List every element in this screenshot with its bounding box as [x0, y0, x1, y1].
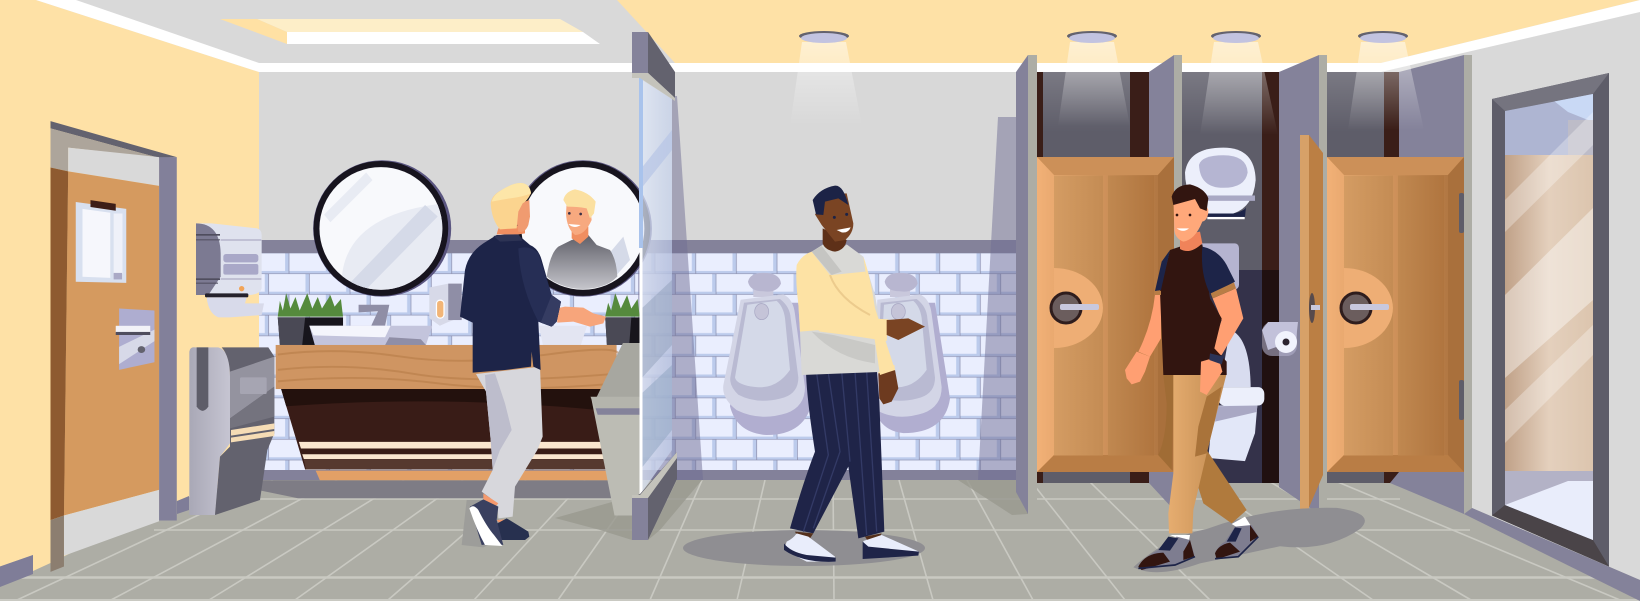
baseboard near dryer: [177, 496, 189, 514]
trash bin: [590, 343, 640, 516]
lower body: [462, 367, 543, 547]
stall partition B: [1149, 55, 1182, 510]
right arm: [1210, 288, 1243, 355]
hair: [491, 183, 531, 229]
wood top: [276, 345, 617, 389]
eyes and smile: [833, 213, 851, 232]
mirror right: [514, 160, 652, 297]
towel dispenser and hand dryer: [189, 223, 274, 515]
reflection glare: [599, 236, 630, 287]
light gradient back wall: [1037, 72, 1399, 132]
counter: [276, 345, 619, 480]
wainscot band: [259, 240, 1019, 253]
right hand: [1200, 357, 1222, 395]
ceiling: grey section: [0, 0, 690, 72]
mirror reflection of man: [547, 189, 630, 291]
hair: [1172, 184, 1208, 211]
top cap: [632, 32, 648, 73]
neck: [823, 228, 847, 252]
transom: [68, 148, 159, 186]
left wall: [0, 0, 259, 587]
face: [515, 200, 530, 232]
left shoe: [1138, 535, 1195, 570]
hand: [878, 370, 898, 404]
urinals: [723, 273, 950, 435]
left plant pots: [278, 293, 343, 345]
left hand: [1125, 352, 1150, 384]
stalls interior: [1037, 72, 1399, 483]
wall dispenser: [1185, 148, 1256, 219]
arm: [796, 252, 888, 341]
tank: [1197, 243, 1239, 289]
stall door 1: [1037, 157, 1174, 472]
neck: [497, 225, 525, 234]
man walking: [683, 186, 925, 566]
frame top: [51, 121, 177, 158]
yellow band: [797, 272, 880, 332]
lamp 2: [1058, 31, 1130, 126]
faucet: [359, 305, 389, 326]
back leg: [1195, 450, 1247, 523]
ceiling lamps: [790, 31, 1424, 135]
grey strap: [812, 246, 842, 275]
reflection neck: [572, 227, 588, 244]
towel dispenser: [196, 223, 264, 317]
head: [815, 193, 853, 242]
left door: [51, 121, 177, 572]
left arm: [1138, 295, 1161, 357]
door handle plate: [116, 309, 154, 370]
reveal: [51, 128, 159, 171]
cuff: [541, 295, 561, 327]
mirror left: [313, 160, 451, 297]
frame right: [159, 157, 177, 521]
right door with mirror glass: [1492, 73, 1609, 566]
open stall door: [1300, 135, 1323, 512]
lamp 3: [1200, 31, 1278, 135]
floor shadow: [1133, 508, 1365, 572]
floor shadow: [683, 530, 925, 566]
floor: [0, 480, 1640, 601]
lower chest shadow: [812, 332, 875, 363]
reflection body: [547, 235, 617, 291]
reflection eyes and smile: [568, 212, 582, 227]
right baseboard: [1464, 508, 1640, 601]
lamp 4: [1348, 31, 1424, 130]
right stall partition D: [1390, 55, 1472, 514]
toilet: [1185, 148, 1264, 461]
lamp 1: [790, 31, 862, 126]
door sign: [76, 200, 126, 283]
left shoe: [784, 532, 836, 562]
stall partition C: [1262, 55, 1327, 514]
stripes: [299, 442, 604, 448]
upper body: [1125, 184, 1243, 395]
sleeve highlight: [518, 247, 561, 327]
shaded hip: [1158, 375, 1173, 470]
floor shadow under counter: [261, 480, 614, 498]
base band: [259, 470, 1019, 480]
door leaf: [64, 171, 159, 516]
soap dispenser: [429, 284, 462, 326]
left wash area: [51, 121, 652, 572]
right shoe: [863, 533, 919, 559]
stall partition A: [1016, 55, 1037, 514]
right plant pot and basin: [539, 293, 640, 345]
trousers: [476, 367, 543, 518]
lower body: [1138, 373, 1258, 570]
collar: [493, 234, 522, 242]
trousers: [790, 368, 884, 538]
bowl: [1220, 330, 1251, 387]
eyes and smile: [1176, 214, 1191, 231]
orange plinth: [316, 471, 608, 480]
urinal left: [723, 273, 813, 435]
upper body: [460, 183, 606, 373]
door edge: [51, 167, 68, 520]
partition shadows on wall: [638, 96, 1016, 480]
upper body: [796, 186, 925, 375]
face: [1173, 192, 1208, 242]
lower body: [784, 365, 919, 562]
front leg: [1168, 373, 1227, 533]
bottom rail: [632, 452, 677, 540]
floor shadow: [462, 500, 507, 547]
watch: [1209, 353, 1224, 364]
sleeve fold: [830, 275, 870, 315]
sweater: [797, 244, 888, 375]
jacket: [460, 235, 561, 373]
reflection face: [566, 203, 592, 235]
man with dark t-shirt: [1125, 184, 1365, 572]
front shoe: [469, 493, 503, 546]
hinges: [1459, 193, 1464, 420]
lower dark wall: [1182, 270, 1279, 483]
right sleeve: [1202, 247, 1235, 295]
seat: [1218, 387, 1264, 406]
back shoe: [497, 518, 529, 540]
handle plate and lever: [1344, 268, 1393, 348]
ceiling light panel: [220, 19, 600, 44]
man at mirror: [460, 183, 606, 547]
neck: [1180, 232, 1202, 251]
hair: [813, 186, 848, 215]
hand: [887, 318, 925, 340]
reflection hair: [563, 189, 596, 218]
dark pillars: [1037, 72, 1399, 483]
urinal right: [873, 273, 950, 433]
glass pane: [639, 78, 672, 496]
toilet paper roll: [1262, 322, 1298, 356]
tile wall: [259, 253, 1019, 470]
glass partition: [632, 32, 677, 540]
stall door 2: [1327, 157, 1464, 472]
left wall white strip: [36, 0, 259, 72]
ceiling: yellow section: [617, 0, 1640, 63]
hand: [557, 307, 606, 327]
hand dryer: [189, 347, 274, 515]
floor shadows of partitions: [555, 480, 1028, 540]
base: [1208, 406, 1257, 461]
other sleeve: [863, 257, 895, 375]
white cornice strip: [259, 0, 1640, 72]
sink left: [309, 326, 432, 345]
t-shirt: [1160, 244, 1227, 375]
baseboard front: [0, 555, 33, 587]
cuff: [876, 365, 895, 373]
dark cabinet: [281, 389, 606, 470]
threshold: [64, 490, 159, 556]
right shoe: [1215, 517, 1258, 559]
back wall: [259, 72, 1389, 240]
left sleeve: [1155, 250, 1170, 291]
handle plate and lever: [1054, 268, 1103, 348]
right wall: [1472, 13, 1640, 580]
